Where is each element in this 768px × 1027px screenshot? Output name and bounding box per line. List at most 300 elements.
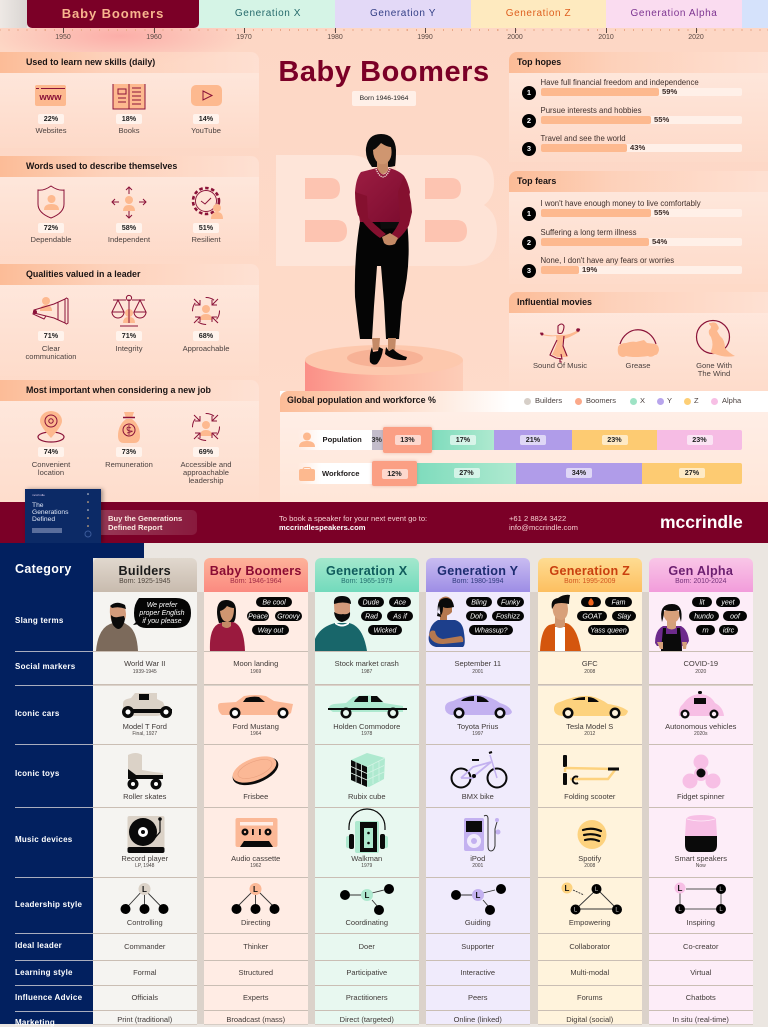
ideal leader	[315, 934, 418, 960]
learning style	[649, 961, 752, 985]
leadership diagram	[204, 878, 308, 933]
panel: most important when considering a new job	[0, 380, 259, 460]
heading: Global population and workforce %	[287, 395, 436, 405]
influence advice: Chatbots	[686, 993, 716, 1002]
car: 1997	[472, 730, 483, 736]
slang illustration: Dude	[363, 600, 379, 606]
leadership diagram	[93, 878, 196, 933]
header: Gen Alpha	[668, 564, 733, 578]
leadership diagram: L	[574, 908, 578, 914]
social marker: 1969	[250, 669, 261, 675]
ideal leader	[426, 934, 530, 960]
leadership diagram: L	[678, 907, 682, 913]
tab: Generation Z: Generation Z	[506, 8, 571, 19]
hope 2: 2	[527, 116, 531, 125]
heading	[509, 52, 768, 73]
car: Holden Commodore	[333, 722, 400, 731]
column: Gen Alpha	[649, 558, 752, 1024]
movie: Gone With The Wind: The Wind	[698, 369, 730, 378]
slang illustration	[93, 592, 196, 651]
learning style	[538, 961, 642, 985]
marketing	[204, 1011, 308, 1024]
header	[93, 558, 196, 592]
toy	[93, 745, 196, 807]
leadership diagram: L	[476, 891, 481, 900]
ideal leader	[93, 934, 196, 960]
heading	[0, 156, 259, 177]
item: accessible and approachable leadership	[180, 413, 232, 485]
music device: 1962	[250, 862, 261, 868]
item: dependable	[31, 185, 72, 244]
item: websites: 22%	[44, 114, 58, 123]
car: Toyota Prius	[457, 722, 498, 731]
hope 1: 59%	[662, 87, 677, 96]
label: Iconic cars: Iconic cars	[15, 708, 60, 718]
marketing	[538, 1011, 642, 1024]
leadership diagram: L	[615, 908, 619, 914]
icon: briefcase	[299, 467, 315, 481]
header: Born: 1925-1945	[119, 578, 170, 585]
music device	[93, 808, 196, 877]
slang illustration: proper English	[138, 610, 185, 617]
timeline year labels: 1990	[417, 34, 433, 41]
slang illustration: Wicked	[374, 628, 398, 634]
leadership diagram: L	[365, 891, 370, 900]
fear 3: None, I don't have any fears or worries	[540, 256, 674, 265]
item: convenient location: 74%	[44, 447, 58, 456]
item: dependable: 72%	[44, 223, 58, 232]
hope 2: 55%	[654, 115, 669, 124]
music device	[204, 808, 308, 877]
music device	[426, 808, 530, 877]
social marker	[426, 652, 530, 684]
music device	[315, 808, 418, 877]
leadership diagram: Controlling	[127, 918, 163, 927]
label: Iconic toys: Iconic toys	[15, 768, 60, 778]
row: population: 13%	[400, 435, 415, 444]
toy	[426, 745, 530, 807]
leadership diagram: Empowering	[569, 918, 611, 927]
item: convenient location: Convenient	[32, 460, 70, 468]
timeline year labels: 2020	[688, 34, 704, 41]
item: clear communication: 71%	[44, 331, 58, 340]
hope 3: Travel and see the world	[540, 134, 626, 143]
toy	[649, 745, 752, 807]
fear 1: I won't have enough money to live comfortably	[540, 199, 701, 208]
social marker: Moon landing	[233, 659, 278, 668]
social marker: 1939-1945	[133, 669, 157, 675]
fear 2: 2	[527, 238, 531, 247]
leadership diagram: L	[253, 885, 258, 894]
music device: iPod	[470, 854, 485, 863]
influence advice: Forums	[577, 993, 602, 1002]
car: 1964	[250, 730, 261, 736]
music device: Audio cassette	[231, 854, 280, 863]
column: Builders	[93, 558, 196, 1024]
hope 1: Have full financial freedom and independence	[540, 78, 699, 87]
item: remuneration	[105, 412, 153, 468]
fear 2: Suffering a long term illness	[540, 228, 637, 237]
text: speaker booking	[279, 514, 459, 532]
label: Music devices: Music devices	[15, 835, 72, 844]
item: convenient location	[32, 411, 70, 477]
item: clear communication: Clear	[42, 344, 60, 352]
social marker	[649, 652, 752, 684]
label: Learning style: Learning style	[15, 968, 73, 976]
header: Generation X	[326, 564, 407, 578]
car	[315, 686, 418, 744]
header: Born: 2010-2024	[675, 578, 726, 585]
learning style: Virtual	[690, 968, 711, 977]
leadership diagram: L	[719, 907, 723, 913]
social marker	[93, 652, 196, 684]
report cover: Generations	[32, 509, 68, 516]
row: population	[299, 426, 742, 454]
fear 1: 55%	[654, 208, 669, 217]
row: population: 3%	[372, 435, 382, 444]
label: Slang terms: Slang terms	[15, 616, 64, 624]
report cover: The	[32, 502, 44, 508]
slang illustration: Rad	[365, 614, 379, 620]
influence advice	[426, 986, 530, 1010]
movie: Sound Of Music	[533, 324, 587, 370]
ideal leader	[538, 934, 642, 960]
hope 1	[522, 78, 742, 100]
tab: Generation X: Generation X	[235, 8, 301, 19]
item: books	[112, 84, 146, 135]
slang illustration: yeet	[720, 600, 736, 606]
toy: Fidget spinner	[677, 792, 725, 801]
social marker: Stock market crash	[335, 659, 399, 668]
slang illustration: Bling	[471, 600, 487, 606]
row: workforce: 27%	[459, 468, 474, 477]
music device: Now	[696, 862, 706, 868]
item: integrity: Integrity	[115, 344, 142, 352]
born date badge: Born 1946-1964	[360, 95, 408, 102]
toy: BMX bike	[462, 792, 494, 801]
row: workforce: 12%	[387, 468, 402, 478]
marketing: In situ (real-time)	[673, 1015, 729, 1024]
music device: Spotify	[578, 854, 601, 863]
legend	[524, 396, 742, 405]
slang illustration: if you please	[142, 618, 182, 625]
footer band	[0, 502, 768, 543]
header	[204, 558, 308, 592]
slang illustration: Ace	[393, 600, 406, 606]
car: Tesla Model S	[566, 722, 613, 731]
slang illustration: Foshizz	[496, 614, 521, 620]
leadership diagram: Coordinating	[345, 918, 388, 927]
slang illustration	[538, 592, 642, 651]
heading: Category: Category	[15, 562, 72, 576]
slang illustration: As if	[392, 614, 408, 620]
header	[538, 558, 642, 592]
header	[426, 558, 530, 592]
car: Ford Mustang	[233, 722, 279, 731]
leadership diagram: L	[595, 887, 599, 893]
item: approachable	[182, 297, 230, 352]
learning style	[315, 961, 418, 985]
music device: 1979	[361, 862, 372, 868]
fear 3: 19%	[582, 265, 597, 274]
legend: Alpha	[722, 396, 741, 405]
slang illustration: Peace	[248, 614, 268, 620]
marketing	[315, 1011, 418, 1024]
row: population: 23%	[607, 435, 622, 444]
movie: Sound Of Music: Sound Of Music	[533, 361, 587, 370]
legend: Z	[694, 396, 699, 405]
tab: Baby Boomers	[27, 0, 199, 28]
influence advice	[93, 986, 196, 1010]
hope 2	[522, 106, 742, 128]
timeline year labels: 2010	[598, 34, 614, 41]
heading	[0, 380, 259, 401]
slang illustration	[426, 592, 530, 651]
slang illustration	[315, 592, 418, 651]
slang illustration	[204, 592, 308, 651]
leadership diagram: Inspiring	[687, 918, 715, 927]
item: youtube: 14%	[199, 114, 213, 123]
influence advice: Practitioners	[346, 993, 388, 1002]
ideal leader: Doer	[359, 942, 375, 951]
marketing	[93, 1011, 196, 1024]
leadership diagram: L	[142, 885, 147, 894]
social marker: 2001	[472, 669, 483, 675]
item: remuneration: 73%	[122, 447, 136, 456]
leadership diagram	[315, 878, 418, 933]
row: workforce	[299, 460, 742, 488]
item: websites: www	[38, 92, 62, 103]
fear 2: 54%	[652, 237, 667, 246]
label: Marketing: Marketing	[15, 1018, 55, 1027]
platform	[305, 345, 463, 391]
item: remuneration: Remuneration	[105, 460, 153, 468]
music device: LP, 1948	[135, 862, 154, 868]
car	[538, 686, 642, 744]
text: location	[38, 468, 64, 477]
heading	[509, 292, 768, 313]
ideal leader: Thinker	[243, 942, 268, 951]
fear 3	[522, 256, 742, 278]
social marker: September 11	[454, 659, 501, 668]
movie: Gone With The Wind: Gone With	[696, 361, 732, 370]
fear 1	[522, 199, 742, 221]
ideal leader: Collaborator	[569, 942, 610, 951]
row: workforce: 27%	[685, 468, 699, 477]
slang illustration: GOAT	[582, 614, 602, 620]
slang illustration: Funky	[501, 600, 521, 606]
panel: influential movies	[509, 292, 768, 360]
car	[204, 686, 308, 744]
item: youtube	[191, 85, 222, 135]
leadership diagram: Directing	[241, 918, 271, 927]
car: Autonomous vehicles	[665, 722, 736, 731]
learning style	[204, 961, 308, 985]
influence advice: Peers	[468, 993, 488, 1002]
text: buy report button: Defined Report	[108, 523, 162, 532]
toy	[315, 745, 418, 807]
car: 2012	[584, 730, 595, 736]
legend: Builders	[535, 396, 562, 405]
social marker: World War II	[124, 659, 165, 668]
label: Ideal leader: Ideal leader	[15, 941, 62, 950]
car	[93, 686, 196, 744]
header: Builders	[119, 564, 171, 578]
hope 3: 43%	[630, 143, 645, 152]
tab: Generation Z	[471, 0, 606, 28]
column: Generation Z	[538, 558, 642, 1024]
title: Baby Boomers: Baby Boomers	[278, 56, 490, 88]
panel: qualities valued in a leader	[0, 264, 259, 340]
toy: Rubix cube	[348, 792, 386, 801]
timeline year labels: 2000	[507, 34, 523, 41]
slang illustration: Yass queen	[590, 628, 627, 634]
timeline year labels: 1960	[146, 34, 162, 41]
heading	[280, 391, 510, 412]
movie: Gone With The Wind	[696, 320, 735, 378]
heading: Top hopes	[517, 57, 561, 67]
header	[649, 558, 752, 592]
slang illustration: Be cool	[262, 600, 286, 606]
heading: Qualities valued in a leader	[26, 269, 140, 279]
learning style: Multi-modal	[570, 968, 609, 977]
slang illustration: We prefer	[147, 602, 178, 609]
panel: used to learn new skills	[0, 52, 259, 122]
header: Baby Boomers	[210, 564, 302, 578]
text: speaker booking: mccrindlespeakers.com	[279, 522, 366, 532]
label: Leadership style: Leadership style	[15, 900, 82, 909]
music device	[649, 808, 752, 877]
navy category column	[0, 543, 144, 558]
heading	[509, 171, 768, 192]
social marker: 2020	[695, 669, 706, 675]
tab: Generation X	[199, 0, 335, 28]
timeline ruler	[0, 28, 768, 33]
tab: Baby Boomers: Baby Boomers	[62, 6, 164, 21]
label: Influence Advice: Influence Advice	[15, 992, 82, 1002]
text: buy report button: Buy the Generations	[108, 514, 182, 523]
leadership diagram	[538, 878, 642, 933]
item: independent: Independent	[108, 234, 150, 244]
influence advice: Experts	[243, 993, 268, 1002]
text: speaker booking: To book a speaker for your next event go to:	[279, 514, 427, 522]
row: population: 21%	[526, 435, 540, 444]
heading	[0, 264, 259, 285]
item: accessible and approachable leadership: Accessible and	[180, 460, 232, 468]
slang illustration: lit	[699, 600, 706, 606]
row: population: Population	[322, 435, 362, 444]
item: independent: 58%	[122, 223, 136, 232]
header: Generation Y	[437, 564, 518, 578]
car: 2020s	[694, 730, 708, 736]
hope 3	[522, 134, 742, 156]
slang illustration: rn	[702, 628, 709, 634]
leadership diagram: L	[565, 884, 570, 893]
toy: Frisbee	[243, 792, 268, 801]
tab: Generation Alpha	[606, 0, 742, 28]
car: 1978	[361, 730, 372, 736]
social marker: GFC	[582, 659, 598, 668]
logo: mccrindle: mccrindle	[660, 512, 743, 532]
item: accessible and approachable leadership: leadership	[188, 476, 224, 485]
panel: global population and workforce	[280, 391, 768, 502]
legend: Boomers	[586, 396, 616, 405]
panel: top hopes	[509, 52, 768, 132]
ideal leader	[204, 934, 308, 960]
text: contact	[509, 514, 599, 532]
item: approachable: 68%	[199, 331, 213, 340]
text: communication	[25, 352, 77, 361]
fear 3: 3	[527, 266, 531, 275]
slang illustration: Way out	[258, 628, 284, 634]
item: clear communication	[25, 297, 77, 361]
social marker: 1987	[361, 669, 372, 675]
influence advice: Officials	[131, 993, 158, 1002]
hope 3: 3	[527, 144, 531, 153]
navy sidebar	[0, 558, 93, 1024]
influence advice	[204, 986, 308, 1010]
report cover: mccrindle	[32, 493, 45, 497]
social marker	[204, 652, 308, 684]
slang illustration: Groovy	[277, 614, 300, 620]
learning style: Interactive	[460, 968, 495, 977]
icon: person	[299, 432, 315, 447]
marketing: Print (traditional)	[117, 1015, 172, 1024]
item: books: 18%	[122, 114, 136, 123]
header: Born: 1965-1979	[341, 578, 392, 585]
slang illustration: idrc	[723, 628, 735, 634]
row: population: 17%	[456, 435, 470, 444]
hope 2: Pursue interests and hobbies	[540, 106, 642, 115]
item: integrity	[111, 294, 147, 352]
item: resilient: 51%	[199, 223, 213, 232]
column: Generation X	[315, 558, 418, 1024]
item: books: Books	[118, 126, 140, 135]
row: workforce: Workforce	[322, 469, 359, 478]
music device	[538, 808, 642, 877]
item: approachable: Approachable	[183, 344, 229, 352]
slang illustration	[649, 592, 752, 651]
marketing: Online (linked)	[454, 1015, 502, 1024]
car	[649, 686, 752, 744]
ideal leader	[649, 934, 752, 960]
car: Model T Ford	[123, 722, 167, 731]
hope 1: 1	[527, 88, 531, 97]
social marker: COVID-19	[683, 659, 718, 668]
born date badge	[352, 91, 416, 106]
influence advice	[315, 986, 418, 1010]
music device: Record player	[121, 854, 168, 863]
panel: top background	[0, 28, 768, 502]
car: Final, 1927	[132, 730, 157, 736]
slang illustration: Whassup?	[474, 628, 508, 634]
panel: words used to describe themselves	[0, 156, 259, 228]
social marker: 2008	[584, 669, 595, 675]
leadership diagram	[426, 878, 530, 933]
header: Born: 1995-2009	[564, 578, 615, 585]
item: dependable: Dependable	[31, 234, 71, 244]
item: websites: Websites	[35, 126, 67, 135]
movie: Grease	[618, 329, 659, 370]
report cover: Defined	[32, 516, 55, 523]
toy	[204, 745, 308, 807]
header: Born: 1980-1994	[452, 578, 503, 585]
toy	[538, 745, 642, 807]
heading	[0, 52, 259, 73]
timeline year labels: 1970	[236, 34, 252, 41]
heading: Used to learn new skills (daily)	[26, 57, 155, 67]
label: Social markers: Social markers	[15, 662, 75, 671]
